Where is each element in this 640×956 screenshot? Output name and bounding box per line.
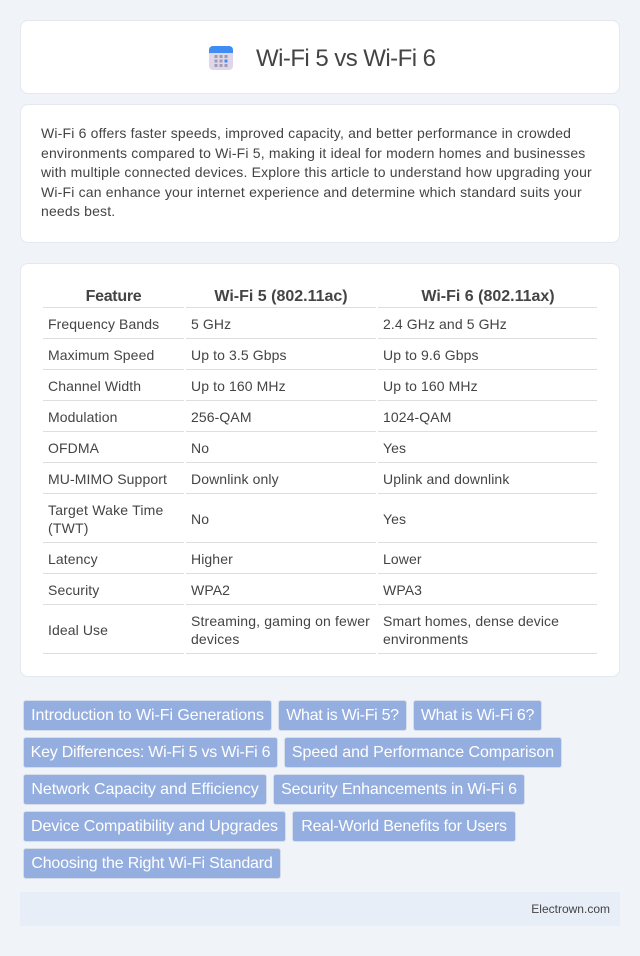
tag: Security Enhancements in Wi-Fi 6 <box>281 781 517 798</box>
comparison table: Target Wake Time <box>48 502 164 518</box>
tag: Key Differences: Wi-Fi 5 vs Wi-Fi 6 <box>31 744 270 761</box>
comparison table: Feature <box>86 288 141 305</box>
comparison table: Wi-Fi 5 (802.11ac) <box>214 288 348 305</box>
tag: Real-World Benefits for Users <box>301 818 507 835</box>
comparison table: devices <box>191 631 240 647</box>
comparison table: Up to 160 MHz <box>383 378 478 394</box>
comparison table: Maximum Speed <box>48 347 154 363</box>
tag <box>23 737 278 768</box>
comparison table: 1024-QAM <box>383 409 452 425</box>
intro paragraph: environments compared to Wi-Fi 5, making it ideal for modern homes and businesses <box>41 145 586 161</box>
tag <box>23 700 272 731</box>
comparison table: Up to 3.5 Gbps <box>191 347 287 363</box>
comparison table: Frequency Bands <box>48 316 159 332</box>
comparison table: Channel Width <box>48 378 141 394</box>
tag <box>23 848 281 879</box>
comparison table: WPA2 <box>191 582 230 598</box>
comparison table: (TWT) <box>48 520 89 536</box>
tag <box>273 774 525 805</box>
comparison table: Lower <box>383 551 422 567</box>
header panel <box>20 20 620 94</box>
comparison table: 2.4 GHz and 5 GHz <box>383 316 507 332</box>
topic tags <box>23 700 562 879</box>
comparison table: No <box>191 511 209 527</box>
comparison table: Up to 160 MHz <box>191 378 286 394</box>
tag <box>292 811 516 842</box>
comparison table: WPA3 <box>383 582 422 598</box>
tag <box>23 774 267 805</box>
intro paragraph: Wi-Fi 6 offers faster speeds, improved capacity, and better performance in crowded <box>41 125 571 141</box>
tag: Choosing the Right Wi-Fi Standard <box>31 855 273 872</box>
intro paragraph <box>41 125 592 219</box>
comparison table panel <box>20 263 620 677</box>
tag: What is Wi-Fi 5? <box>286 707 399 724</box>
tag: Device Compatibility and Upgrades <box>31 818 278 835</box>
comparison table: environments <box>383 631 468 647</box>
tag: What is Wi-Fi 6? <box>421 707 534 724</box>
intro text panel <box>20 104 620 243</box>
tag: Network Capacity and Efficiency <box>31 781 259 798</box>
footer bar <box>20 892 620 926</box>
comparison table: 5 GHz <box>191 316 231 332</box>
comparison table: Yes <box>383 440 406 456</box>
intro paragraph: Wi-Fi can enhance your internet experience and determine which standard suits your <box>41 184 582 200</box>
comparison table: MU-MIMO Support <box>48 471 167 487</box>
comparison table: 256-QAM <box>191 409 252 425</box>
comparison table: Modulation <box>48 409 118 425</box>
comparison table: Downlink only <box>191 471 279 487</box>
comparison table: Up to 9.6 Gbps <box>383 347 479 363</box>
tag: Speed and Performance Comparison <box>292 744 554 761</box>
tag <box>278 700 407 731</box>
intro paragraph: needs best. <box>41 203 115 219</box>
footer credit: Electrown.com <box>531 902 610 916</box>
comparison table: Ideal Use <box>48 622 108 638</box>
icon: calendar <box>209 46 233 70</box>
intro paragraph: with multiple connected devices. Explore this article to understand how upgrading your <box>41 164 592 180</box>
comparison table: Higher <box>191 551 233 567</box>
comparison table: OFDMA <box>48 440 99 456</box>
tag <box>413 700 542 731</box>
comparison table: Uplink and downlink <box>383 471 509 487</box>
tag: Introduction to Wi-Fi Generations <box>31 707 264 724</box>
comparison table <box>43 288 597 654</box>
comparison table: Yes <box>383 511 406 527</box>
comparison table: No <box>191 440 209 456</box>
comparison table: Latency <box>48 551 98 567</box>
title: Wi-Fi 5 vs Wi-Fi 6 <box>256 45 435 72</box>
comparison table: Streaming, gaming on fewer <box>191 613 370 629</box>
comparison table: Security <box>48 582 99 598</box>
tag <box>23 811 286 842</box>
tag <box>284 737 562 768</box>
comparison table: Smart homes, dense device <box>383 613 559 629</box>
comparison table: Wi-Fi 6 (802.11ax) <box>421 288 555 305</box>
